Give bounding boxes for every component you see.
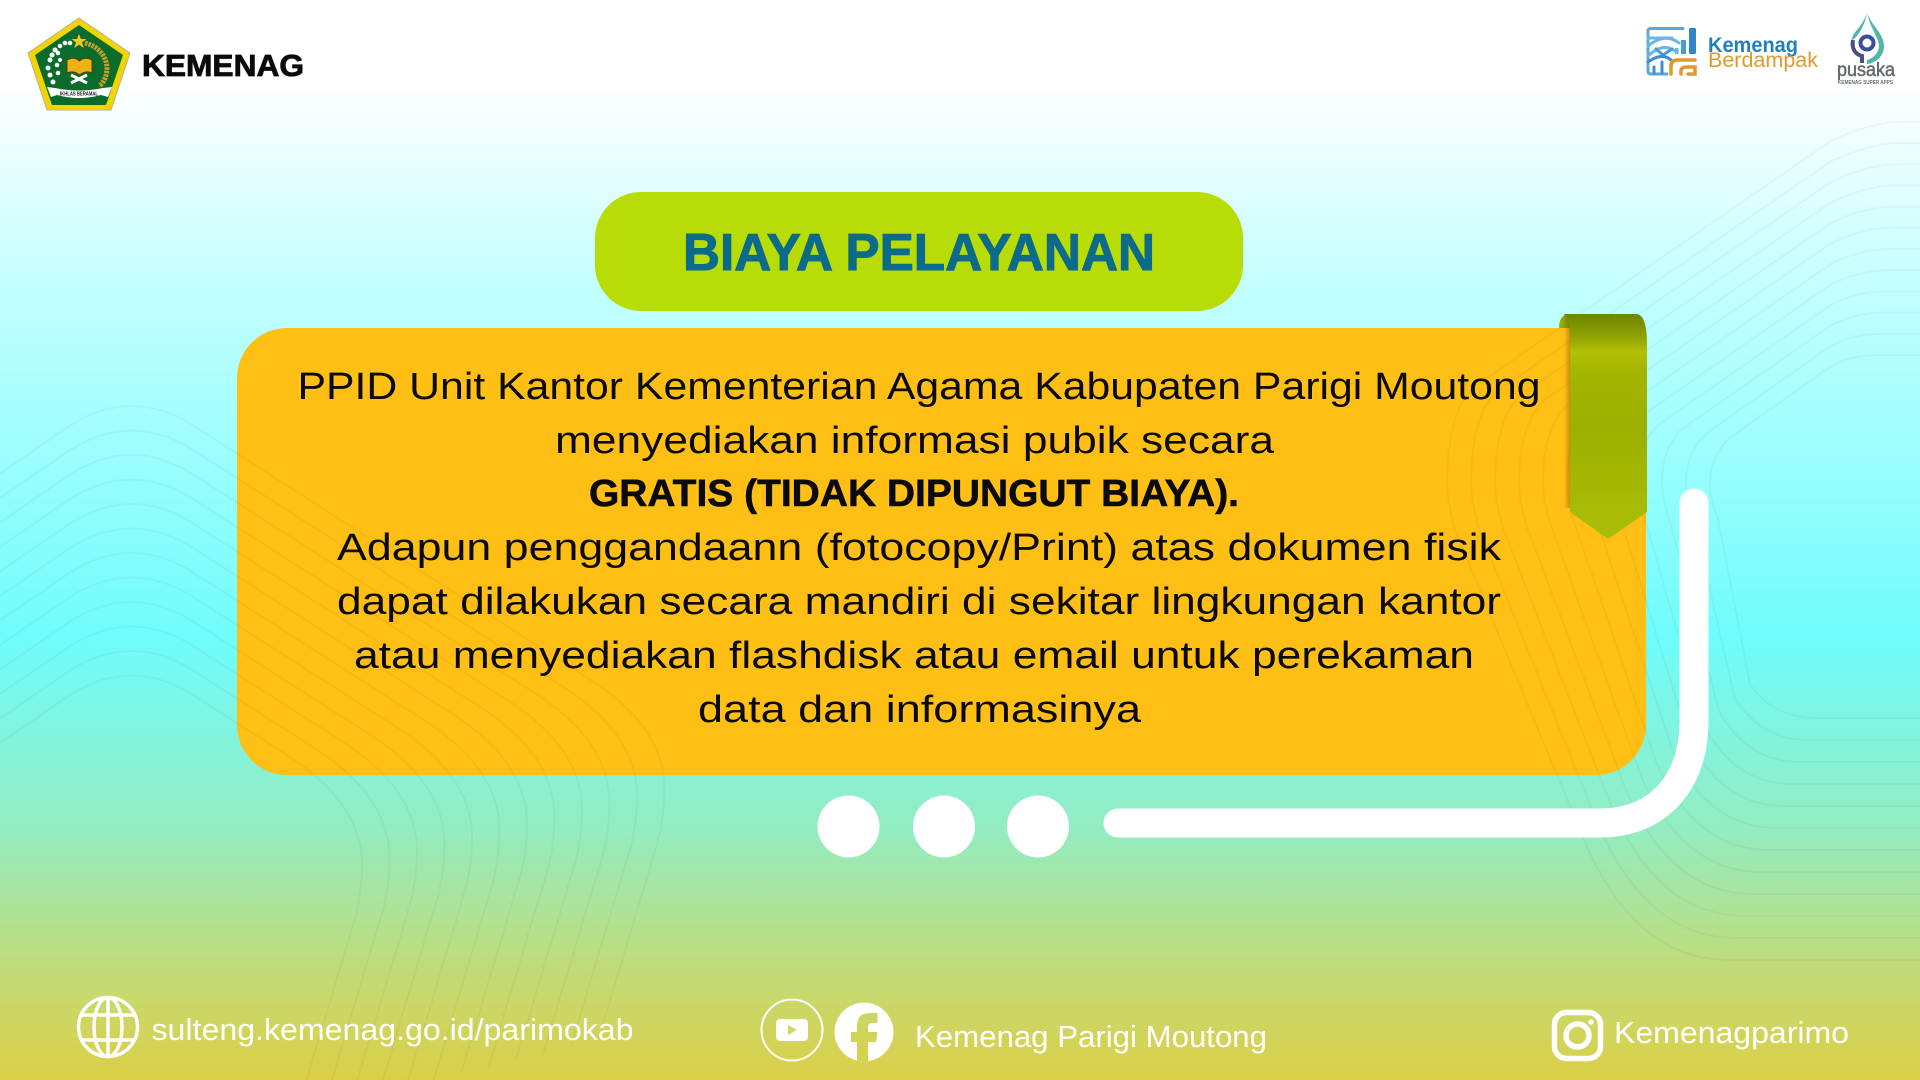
brand name: KEMENAG: KEMENAG: [142, 48, 304, 83]
title pill: [595, 192, 1243, 311]
text block: service cost description: menyediakan informasi pubik secara: [555, 420, 1275, 462]
text block: service cost description: atau menyediakan flashdisk atau email untuk perekaman: [354, 635, 1474, 677]
text block: service cost description: Adapun penggandaann (fotocopy/Print) atas dokumen fisik: [337, 527, 1502, 569]
website address: sulteng.kemenag.go.id/parimokab: [152, 1012, 634, 1047]
text block: service cost description: data dan informasinya: [698, 689, 1142, 731]
emblem: Kementerian Agama logo: IKHLAS BERAMAL: [60, 92, 98, 98]
text block: service cost description: [298, 366, 1540, 731]
Facebook and YouTube account name: Kemenag Parigi Moutong: [915, 1019, 1267, 1054]
title: BIAYA PELAYANAN: BIAYA PELAYANAN: [683, 224, 1155, 282]
panel: main information card: [237, 328, 1646, 775]
emblem: Kementerian Agama logo: [28, 18, 130, 110]
text block: service cost description: dapat dilakukan secara mandiri di sekitar lingkungan kantor: [337, 581, 1501, 623]
text block: service cost description: GRATIS (TIDAK DIPUNGUT BIAYA).: [589, 473, 1239, 515]
logo text: Kemenag: Kemenag: [1708, 34, 1798, 57]
text block: service cost description: PPID Unit Kantor Kementerian Agama Kabupaten Parigi Moutong: [298, 366, 1540, 408]
icon: YouTube: [762, 1000, 822, 1060]
icon: Facebook: [834, 1002, 894, 1063]
connector line: [1118, 503, 1694, 823]
Instagram account name: Kemenagparimo: [1614, 1015, 1849, 1050]
ribbon bookmark: [1559, 314, 1647, 539]
icon: Instagram: [1554, 1012, 1600, 1058]
logo text: pusaka: pusaka: [1837, 60, 1895, 81]
icon: globe: [78, 997, 138, 1057]
logo text: Berdampak: Berdampak: [1708, 49, 1819, 72]
three white dots: [818, 796, 1069, 858]
logo: Kemenag Berdampak: [1648, 28, 1696, 74]
logo: Pusaka drop: [1852, 13, 1884, 64]
logo tagline: KEMENAG SUPER APPS: [1838, 80, 1894, 86]
